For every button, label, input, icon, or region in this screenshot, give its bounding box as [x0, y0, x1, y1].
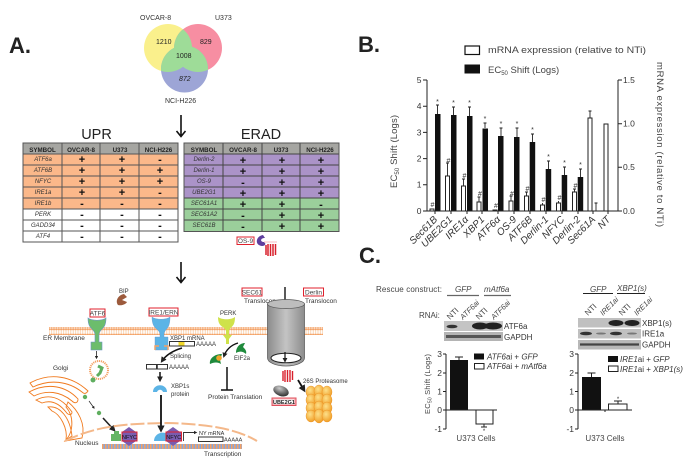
table: ERAD: OVCAR-8: [229, 147, 257, 154]
transcription start arrow: [184, 432, 196, 441]
NFYC complex right: NFYC: [166, 435, 181, 441]
left axis title: Shift (Logs): [389, 115, 400, 168]
significance marks: #: [478, 191, 482, 198]
significance marks: *: [531, 127, 534, 134]
legend: IRE1 rescue: IRE1ai + XBP1(s): [620, 365, 683, 374]
bar chart: IRE1 rescue: [566, 349, 632, 443]
pathway diagram: [29, 287, 348, 458]
heading: panel B: B.: [358, 32, 380, 57]
significance marks: [431, 99, 582, 210]
significance marks: #: [463, 173, 467, 180]
table: UPR: -: [80, 198, 84, 210]
table: ERAD: U373: [274, 147, 289, 154]
table: ERAD: +: [240, 166, 246, 178]
heading: panel C: C.: [359, 243, 381, 268]
table: UPR: +: [119, 176, 125, 188]
table: UPR: NCI-H226: [145, 147, 173, 154]
venn diagram: 829: [200, 39, 212, 46]
table: UPR: -: [80, 209, 84, 221]
transport dots: [83, 395, 114, 430]
arrow: mRNA to protein: [159, 372, 161, 380]
eIF2a: EIF2a: [234, 356, 251, 362]
table: UPR: -: [120, 231, 124, 243]
table: ERAD: Derlin-1: [193, 168, 215, 174]
table: ERAD: Derlin-2: [193, 157, 215, 163]
IRE1 receptor: IRE1/ERN: [149, 310, 179, 316]
bar chart: IRE1 rescue: 2: [569, 368, 574, 378]
table: UPR: U373: [113, 147, 128, 154]
table: UPR: -: [120, 209, 124, 221]
legend: IRE1 rescue: [608, 355, 683, 374]
DNA: [102, 444, 242, 449]
bars: mRNA expression: [430, 118, 608, 211]
western blot: XBP1 rescue: IRE1ai: [598, 295, 621, 317]
venn diagram: 1008: [176, 53, 192, 60]
left axis ticks: 4: [417, 101, 422, 111]
table: ERAD: +: [279, 199, 285, 211]
significance marks: #: [494, 203, 498, 210]
venn diagram: OVCAR-8: [140, 15, 171, 22]
table: ERAD: +: [279, 221, 285, 233]
heading: UPR: UPR: [81, 127, 112, 143]
significance marks: #: [431, 202, 435, 209]
table: UPR: +: [79, 165, 85, 177]
legend: chart B: [464, 45, 646, 77]
left axis ticks: 5: [417, 75, 422, 85]
western blot: XBP1 rescue: GFP: [590, 285, 607, 294]
target mRNA: AAAAA: [224, 438, 243, 444]
table: UPR: +: [157, 176, 163, 188]
bar chart: IRE1 rescue: 1: [569, 386, 574, 396]
table: ERAD: +: [240, 199, 246, 211]
table: ERAD: UBE2G1: [192, 190, 216, 196]
ATF6 receptor: ATF6: [90, 310, 106, 318]
right axis title: mRNA expression (relative to NTi): [654, 62, 665, 227]
rescue construct header: ATF6ai: [457, 298, 481, 322]
table: UPR: OVCAR-8: [67, 147, 95, 154]
western blot: ATF6 rescue: ATF6a: [504, 322, 528, 331]
rescue construct header: NTI: [474, 306, 490, 321]
heading: ERAD: ERAD: [241, 127, 281, 143]
label: Nucleus: Nucleus: [75, 440, 99, 447]
rescue construct header: NTI: [445, 306, 461, 321]
western blot: ATF6 rescue: GAPDH: [504, 333, 533, 342]
blot bands: [444, 321, 503, 331]
category labels: Sec61B: [408, 214, 440, 247]
right axis ticks: [623, 75, 635, 216]
label: ER Membrane: ER Membrane: [43, 335, 85, 342]
table: UPR: +: [157, 165, 163, 177]
PERK receptor: PERK: [220, 311, 236, 317]
table: UPR: -: [120, 220, 124, 232]
splicing arrow: [162, 348, 182, 361]
bar chart: ATF6 rescue: 3: [437, 349, 442, 359]
table: UPR: +: [119, 154, 125, 166]
bar chart: ATF6 rescue: 2: [437, 368, 442, 378]
table: ERAD: +: [318, 188, 324, 200]
proteasome: [306, 385, 332, 423]
bar chart: ATF6 rescue: Shift (Logs): [423, 354, 432, 397]
western blot: XBP1 rescue: XBP1(s): [616, 284, 647, 293]
table: ERAD: +: [279, 166, 285, 178]
eIF2a: [210, 343, 251, 364]
XBP1s protein: XBP1s: [171, 384, 189, 390]
table: UPR: +: [119, 187, 125, 199]
table: ERAD: +: [318, 221, 324, 233]
table: ERAD: -: [241, 221, 245, 233]
nuclear membrane: [65, 423, 257, 441]
arrow: venn to tables: [176, 115, 186, 136]
significance marks: *: [436, 99, 439, 106]
western blot: XBP1 rescue: IRE1ai: [632, 295, 655, 317]
left axis title: EC: [389, 175, 400, 188]
target mRNA: NY mRNA: [199, 431, 225, 437]
table: ERAD: -: [241, 210, 245, 222]
bar chart: ATF6 rescue: 1: [437, 386, 442, 396]
table: ERAD: +: [279, 210, 285, 222]
table: UPR: -: [158, 220, 162, 232]
category labels: NT: [596, 214, 614, 232]
category labels: OS-9: [495, 214, 519, 239]
bar chart: IRE1 rescue: *: [617, 397, 620, 403]
table: ERAD: [184, 143, 339, 233]
legend: chart B: mRNA expression (relative to NTi): [488, 45, 646, 56]
XBP1 mRNA: AAAAA: [196, 342, 216, 348]
significance marks: #: [542, 197, 546, 204]
IRE1 receptor: [149, 308, 179, 350]
table: ERAD: SEC61A1: [191, 201, 217, 207]
arrow: to proteasome: [298, 380, 304, 390]
bar chart: ATF6 rescue: 50: [428, 397, 434, 403]
table: UPR: -: [80, 231, 84, 243]
right axis ticks: 1.0: [623, 118, 635, 128]
category labels: IRE1α: [444, 214, 471, 242]
right axis ticks: 0.0: [623, 206, 635, 216]
UBE2G1 enzyme: [272, 384, 296, 406]
significance marks: #: [574, 183, 578, 190]
table: UPR: -: [158, 231, 162, 243]
UBE2G1 enzyme: UBE2G1: [273, 400, 295, 406]
label: Derlin translocon: Translocon: [305, 298, 337, 305]
table: UPR: ATF6B: [33, 168, 52, 174]
arrow: tables to pathway: [176, 262, 186, 282]
NFYC complex left: NFYC: [122, 435, 137, 441]
bars: EC50 shift: [435, 114, 583, 211]
error bars: [436, 105, 598, 211]
western blot: XBP1 rescue: [578, 284, 672, 350]
left axis title: 50: [395, 167, 401, 175]
western blot: XBP1 rescue: NTI: [617, 302, 633, 317]
bar chart: ATF6 rescue: -1: [434, 424, 442, 434]
bar chart: ATF6 rescue: EC: [423, 403, 432, 414]
legend: chart B: Shift (Logs): [508, 65, 559, 76]
table: ERAD: OS-9: [197, 179, 212, 185]
significance marks: #: [526, 186, 530, 193]
table: ERAD: +: [318, 155, 324, 167]
table: UPR: PERK: [35, 212, 52, 218]
table: UPR: SYMBOL: [29, 147, 56, 154]
category labels: Sec61A: [566, 214, 598, 247]
venn diagram: 1210: [156, 39, 172, 46]
spliced XBP1 mRNA: [146, 364, 189, 371]
table: UPR: -: [158, 198, 162, 210]
bar chart: ATF6 rescue: [423, 349, 497, 443]
XBP1s protein: [153, 384, 189, 398]
left axis ticks: 2: [417, 154, 422, 164]
label: Golgi: Golgi: [53, 365, 68, 372]
label: SEC61 translocon: [242, 288, 276, 305]
label: Derlin translocon: Derlin: [305, 290, 322, 296]
translocon cylinder: [268, 287, 304, 366]
venn diagram: U373: [215, 15, 232, 22]
table: ERAD: -: [241, 177, 245, 189]
table: UPR: ATF4: [35, 234, 51, 240]
western blot: XBP1 rescue: GAPDH: [642, 340, 671, 350]
category labels: Derlin-2: [551, 214, 583, 247]
heading: panel A: A.: [9, 33, 31, 58]
bar chart: ATF6 rescue: U373 Cells: [456, 434, 496, 443]
table: ERAD: -: [319, 199, 323, 211]
table: UPR: +: [79, 154, 85, 166]
table: UPR: ATF6a: [33, 157, 52, 163]
label: Transcription: Transcription: [204, 451, 242, 458]
OS-9 label and substrate: OS-9: [238, 238, 253, 245]
BiP: BIP: [119, 289, 129, 295]
target mRNA: [198, 431, 243, 444]
legend: chart B: 50: [501, 71, 509, 77]
bar chart: IRE1 rescue: -1: [566, 424, 574, 434]
significance marks: *: [468, 100, 471, 107]
western blot: XBP1 rescue: XBP1(s): [642, 319, 672, 328]
XBP1 mRNA: XBP1 mRNA: [170, 336, 205, 342]
legend: ATF6 rescue: ATF6ai + GFP: [486, 352, 538, 362]
category labels: ATF6α: [474, 214, 503, 244]
category labels: XBP1: [461, 214, 487, 241]
PERK receptor: [218, 311, 236, 344]
table: ERAD: SEC61A2: [191, 212, 218, 218]
rescue construct header: Rescue construct:: [376, 285, 442, 294]
category labels: Derlin-1: [519, 214, 551, 247]
significance marks: *: [579, 162, 582, 169]
table: ERAD: +: [318, 210, 324, 222]
XBP1s protein: protein: [171, 392, 189, 398]
NFYC complex right: [154, 427, 182, 446]
table: UPR: -: [158, 187, 162, 199]
table: UPR: -: [158, 154, 162, 166]
table: ERAD: SEC61B: [192, 223, 216, 229]
bar chart: EC50 shift and mRNA expression: [389, 62, 665, 250]
venn diagram: [140, 15, 232, 105]
bar chart: IRE1 rescue: 0: [569, 405, 574, 415]
label: SEC61 translocon: Translocon: [244, 298, 276, 305]
significance marks: *: [500, 121, 503, 128]
table: UPR: +: [119, 165, 125, 177]
table: ERAD: +: [279, 188, 285, 200]
category labels: ATF6B: [505, 214, 535, 244]
table: UPR: -: [120, 198, 124, 210]
legend: IRE1 rescue: IRE1ai + GFP: [620, 355, 670, 364]
venn diagram: NCI-H226: [165, 98, 196, 105]
table: UPR: GADD34: [31, 223, 56, 229]
table: UPR: NFYC: [35, 179, 52, 185]
left axis ticks: 3: [417, 128, 422, 138]
rescue construct header: RNAi:: [419, 311, 440, 320]
bar chart: IRE1 rescue: 3: [569, 349, 574, 359]
table: UPR: IRE1a: [35, 190, 52, 196]
significance marks: #: [558, 195, 562, 202]
ATF6 receptor: [88, 309, 106, 358]
left axis ticks: 0: [417, 206, 422, 216]
ER membrane: [49, 327, 323, 335]
category labels: UBE2G1: [419, 214, 455, 250]
table: UPR: [23, 143, 178, 243]
significance marks: *: [563, 160, 566, 167]
legend: ATF6 rescue: [474, 352, 547, 371]
table: ERAD: NCI-H226: [306, 147, 334, 154]
NFYC complex left: [111, 427, 137, 446]
significance marks: #: [510, 191, 514, 198]
table: ERAD: +: [279, 177, 285, 189]
significance marks: *: [484, 116, 487, 123]
rescue construct header: GFP: [455, 285, 472, 294]
unfolded protein: [283, 370, 292, 382]
significance marks: #: [447, 158, 451, 165]
legend: chart B: EC: [488, 65, 501, 76]
arrow: PERK to eIF2a: [224, 343, 238, 356]
arrow: protein to nucleus: [160, 395, 162, 430]
table: ERAD: +: [318, 177, 324, 189]
rescue construct header: [376, 285, 512, 322]
left axis ticks: 1: [417, 180, 422, 190]
label: Splicing: Splicing: [170, 354, 191, 360]
right axis ticks: 1.5: [623, 75, 635, 85]
table: ERAD: SYMBOL: [191, 147, 217, 154]
table: UPR: -: [158, 209, 162, 221]
rescue construct header: mAtf6a: [484, 285, 510, 294]
table: UPR: +: [79, 176, 85, 188]
table: UPR: -: [80, 220, 84, 232]
vesicle: [90, 361, 108, 382]
significance marks: *: [547, 154, 550, 161]
rescue construct header: ATF6ai: [488, 298, 512, 322]
axes: [423, 80, 622, 214]
significance marks: *: [452, 100, 455, 107]
western blot: XBP1 rescue: NTI: [583, 302, 599, 317]
table: ERAD: +: [279, 155, 285, 167]
label: SEC61 translocon: SEC61: [242, 290, 263, 296]
bar chart: ATF6 rescue: *: [483, 429, 486, 435]
Golgi: [29, 377, 88, 441]
western blot: ATF6 rescue: [376, 285, 533, 342]
legend: ATF6 rescue: ATF6ai + mAtf6a: [486, 362, 547, 371]
category labels: [408, 214, 614, 250]
table: UPR: +: [79, 187, 85, 199]
label: Derlin translocon: [304, 288, 337, 305]
label: 26S Proteasome: 26S Proteasome: [303, 379, 348, 385]
bar chart: IRE1 rescue: U373 Cells: [585, 434, 625, 443]
OS-9 label and substrate: [237, 235, 277, 256]
table: ERAD: +: [240, 155, 246, 167]
inhibition bar: [221, 367, 233, 390]
table: UPR: IRE1b: [35, 201, 52, 207]
spliced XBP1 mRNA: AAAAA: [169, 365, 189, 371]
category labels: NFYC: [540, 214, 568, 241]
XBP1 mRNA: [170, 336, 216, 348]
BiP: [117, 289, 129, 305]
bar chart: ATF6 rescue: 0: [437, 405, 442, 415]
left axis ticks: [417, 75, 422, 216]
table: ERAD: +: [318, 166, 324, 178]
right axis ticks: 0.5: [623, 162, 635, 172]
table: ERAD: +: [240, 188, 246, 200]
western blot: XBP1 rescue: IRE1a: [642, 330, 665, 338]
venn diagram: 872: [179, 76, 191, 83]
label: Protein Translation: Protein Translation: [208, 394, 263, 401]
significance marks: *: [516, 121, 519, 128]
